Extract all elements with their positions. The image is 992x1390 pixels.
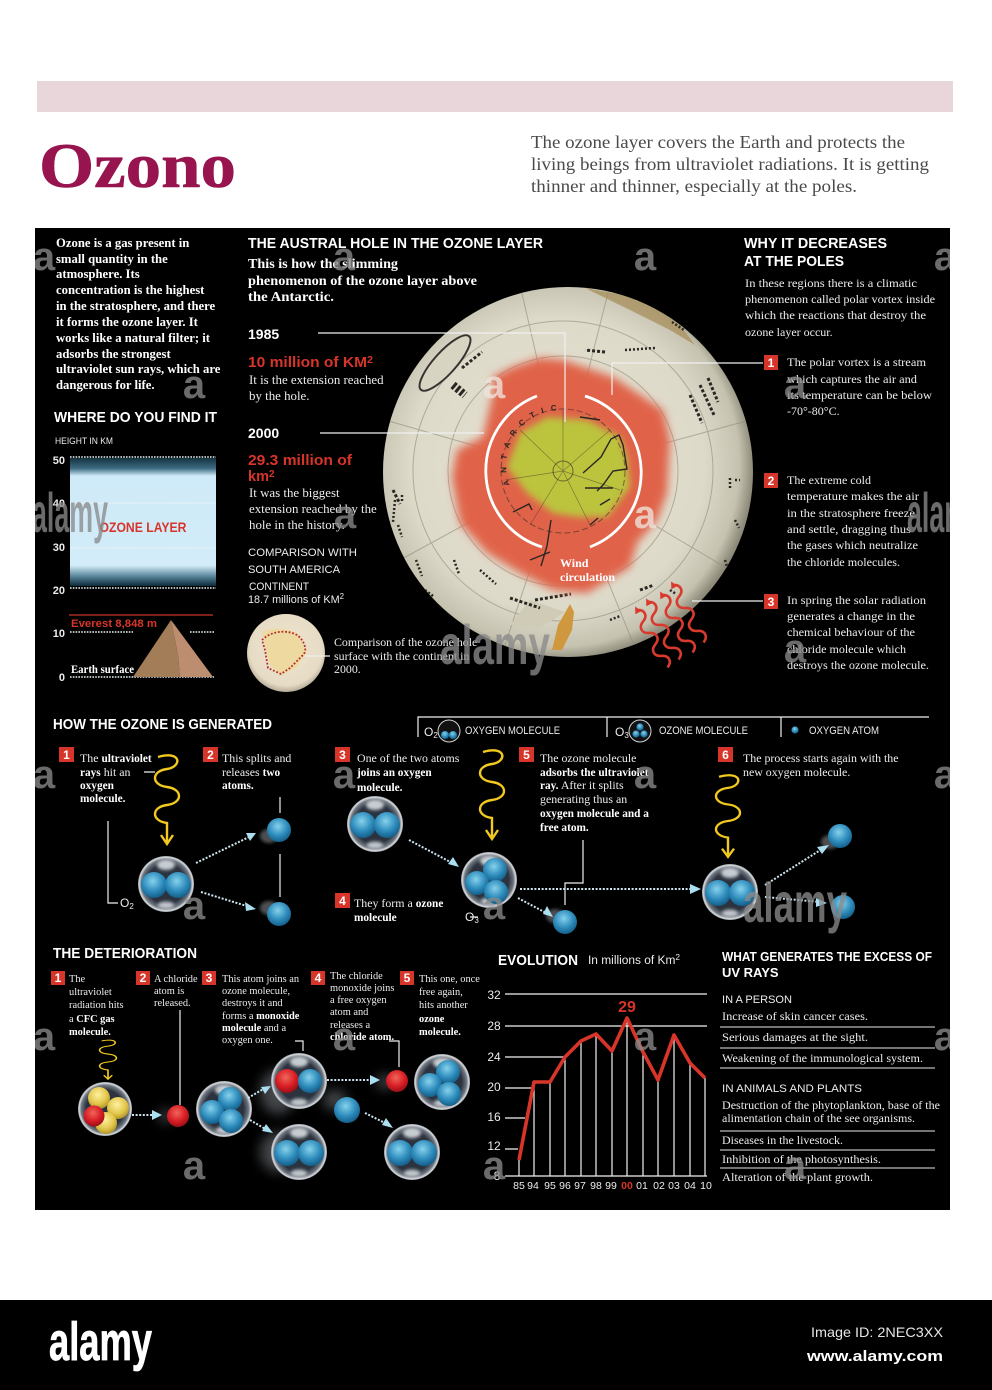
soft molecule shadows — [158, 1070, 394, 1172]
legend: OXYGEN ATOM — [809, 725, 879, 737]
watermark letters: a — [334, 493, 357, 537]
formula labels: O — [465, 910, 474, 924]
footer logo: alamy — [49, 1312, 152, 1372]
left intro text: concentration is the highest — [56, 283, 205, 297]
step 2: This splits and — [222, 751, 291, 765]
1985 data: 2 — [367, 355, 373, 366]
step 1: its temperature can be below — [787, 388, 932, 402]
watermark letters: alamy — [743, 871, 847, 934]
panel: why it decreases: phenomenon called polar vortex inside — [745, 292, 935, 306]
step 3: One of the two atoms — [357, 751, 460, 765]
in animals and plants: IN ANIMALS AND PLANTS — [722, 1083, 862, 1095]
heading: where do you find it: WHERE DO YOU FIND IT — [54, 409, 217, 426]
left intro text: adsorbs the strongest — [56, 347, 171, 361]
step 3: 3 — [768, 595, 775, 609]
step 3: molecule and a — [222, 1023, 286, 1034]
y axis labels: 28 — [487, 1019, 501, 1033]
step 4: a free oxygen — [330, 995, 387, 1006]
oxygen atoms — [267, 818, 855, 934]
step 3: ozone molecule, — [222, 986, 290, 997]
formula labels: 2 — [129, 902, 134, 911]
step 4 — [335, 893, 443, 924]
step 4: releases a — [330, 1020, 370, 1031]
ozone hole: red area — [452, 358, 670, 593]
main black panel — [35, 228, 950, 1210]
step 3 — [335, 747, 460, 794]
watermark letters: a — [483, 884, 506, 928]
globe illustration — [383, 287, 753, 668]
step 2: A chloride — [154, 974, 198, 985]
step 5: 5 — [523, 748, 530, 762]
panel: evolution chart: 2 — [675, 953, 681, 962]
heading: austral hole: THE AUSTRAL HOLE IN THE OZONE LAYER — [248, 235, 543, 252]
heading: austral hole: This is how the slimming — [248, 256, 398, 271]
x axis labels: 99 — [605, 1180, 617, 1192]
height chart — [53, 436, 216, 684]
step 1: molecule. — [69, 1027, 111, 1038]
step 1: 1 — [55, 971, 62, 985]
intro text: thinner and thinner, especially at the poles. — [531, 176, 857, 196]
intro text: living beings from ultraviolet radiations. It is getting — [531, 154, 929, 174]
in a person: IN A PERSON — [722, 994, 792, 1006]
peak value: 29 — [618, 999, 636, 1016]
top pink band — [37, 81, 953, 112]
x axis labels: 96 — [559, 1180, 571, 1192]
heading: austral hole: the Antarctic. — [248, 289, 334, 304]
watermark letters — [32, 235, 983, 1188]
panel: what generates the excess of uv rays: WHAT GENERATES THE EXCESS OF — [722, 949, 932, 964]
panel: evolution chart: In millions of Km — [588, 955, 672, 967]
y axis labels: 8 — [494, 1169, 501, 1183]
wind label — [560, 556, 615, 584]
comparison caption: surface with the continent in — [334, 649, 469, 663]
step 1: -70°-80°C. — [787, 404, 840, 418]
2000 data: 2 — [269, 469, 275, 480]
height chart: HEIGHT IN KM — [55, 436, 113, 446]
data line — [519, 1018, 705, 1160]
comparison caption: Comparison of the ozone hole — [334, 635, 477, 649]
in animals and plants: Inhibition of the photosynthesis. — [722, 1154, 881, 1166]
watermark letters: a — [934, 1015, 957, 1059]
watermark letters: a — [33, 1015, 56, 1059]
step 1: which captures the air and — [787, 372, 917, 386]
step 2 — [136, 971, 198, 1009]
dotted arrows — [132, 1075, 393, 1133]
step 4: monoxide joins — [330, 983, 394, 994]
panel: evolution chart: EVOLUTION — [498, 952, 578, 969]
height chart: 10 — [53, 628, 65, 640]
in animals and plants: Alteration of the plant growth. — [722, 1172, 873, 1184]
x axis labels: 02 — [653, 1180, 665, 1192]
step 1: a CFC gas — [69, 1014, 115, 1025]
watermark letters: a — [634, 235, 657, 279]
in a person: Serious damages at the sight. — [722, 1032, 868, 1044]
left intro text: in the stratosphere, and there — [56, 299, 216, 313]
height chart: 0 — [59, 672, 65, 684]
step 3: oxygen one. — [222, 1035, 273, 1046]
comparison with south america: CONTINENT — [249, 581, 309, 593]
step 6: 6 — [722, 748, 729, 762]
watermark letters: a — [33, 753, 56, 797]
solar radiation red waves — [630, 579, 708, 670]
wind label: Wind — [560, 556, 589, 570]
y axis labels: 12 — [487, 1139, 501, 1153]
y axis labels: 32 — [487, 988, 501, 1002]
1985 data: 10 million of KM — [248, 355, 359, 371]
step 5: The ozone molecule — [540, 751, 636, 765]
1985 data: It is the extension reached — [249, 373, 384, 387]
watermark letters: a — [483, 1144, 506, 1188]
step 4 — [311, 971, 394, 1043]
left intro text: Ozone is a gas present in — [56, 236, 189, 250]
step 3 — [202, 971, 300, 1046]
step 3: forms a monoxide — [222, 1011, 300, 1022]
intro text — [531, 132, 929, 196]
heading: austral hole: phenomenon of the ozone layer above — [248, 273, 477, 288]
leader lines to globe — [318, 333, 565, 433]
step 1: The polar vortex is a stream — [787, 355, 927, 369]
step 4: atom and — [330, 1007, 369, 1018]
legend: 2 — [433, 731, 438, 740]
x axis labels: 95 — [544, 1180, 556, 1192]
ultraviolet rays — [155, 750, 740, 857]
in animals and plants: Destruction of the phytoplankton, base of the — [722, 1100, 940, 1112]
watermark letters: a — [333, 753, 356, 797]
legend: OZONE MOLECULE — [659, 725, 748, 737]
in animals and plants: Diseases in the livestock. — [722, 1135, 843, 1147]
comparison with south america: SOUTH AMERICA — [248, 564, 341, 576]
step 6: The process starts again with the — [743, 751, 899, 765]
comparison with south america: 2 — [340, 592, 345, 601]
panel: how the ozone is generated — [53, 716, 929, 934]
step 3: In spring the solar radiation — [787, 593, 926, 607]
step 4: They form a ozone — [354, 896, 443, 910]
panel: how the ozone is generated: HOW THE OZONE IS GENERATED — [53, 716, 272, 733]
2000 data: 2000 — [248, 425, 279, 441]
step 1: oxygen — [80, 780, 115, 792]
x axis labels: 98 — [590, 1180, 602, 1192]
step 3: molecule. — [357, 782, 403, 794]
step 1: molecule. — [80, 793, 126, 805]
x axis labels: 00 — [621, 1180, 633, 1192]
step 1: ultraviolet — [69, 987, 112, 998]
step 5 — [400, 971, 480, 1038]
step 2 — [764, 473, 919, 569]
watermark letters: a — [183, 884, 206, 928]
step 5: ray. After it splits — [540, 778, 624, 792]
watermark letters: a — [483, 363, 506, 407]
connector lines — [108, 772, 583, 917]
step 5: This one, once — [419, 974, 480, 985]
ozone and oxygen molecules — [196, 1053, 470, 1180]
x axis labels: 04 — [684, 1180, 696, 1192]
watermark letters: a — [934, 235, 957, 279]
height chart: Everest 8,848 m — [71, 618, 157, 630]
atom shadows — [260, 829, 839, 923]
watermark letters: alamy — [440, 613, 550, 676]
legend: O — [424, 725, 433, 739]
height chart: OZONE LAYER — [100, 519, 186, 535]
left intro text: dangerous for life. — [56, 378, 155, 392]
ozone layer band — [70, 458, 216, 586]
CFC molecule — [78, 1082, 132, 1136]
step 2: releases two — [222, 765, 281, 779]
watermark letters: alamy — [32, 481, 108, 544]
step 4: chloride atom. — [330, 1032, 394, 1043]
x axis labels: 01 — [636, 1180, 648, 1192]
step 3: generates a change in the — [787, 609, 915, 623]
ozone hole: green centre — [507, 417, 630, 517]
watermark letters: a — [934, 753, 957, 797]
in a person: Weakening of the immunological system. — [722, 1053, 923, 1065]
step 3 — [764, 593, 929, 672]
step 1: 1 — [63, 748, 70, 762]
watermark letters: a — [784, 627, 807, 671]
legend — [418, 717, 929, 742]
x axis labels: 03 — [668, 1180, 680, 1192]
step 1 — [764, 355, 932, 418]
x axis labels — [513, 1180, 712, 1192]
formula labels: 3 — [474, 916, 479, 925]
wind circulation arcs — [486, 396, 641, 547]
step 1 — [51, 971, 124, 1038]
panel: the deterioration: THE DETERIORATION — [53, 945, 197, 962]
radiation wave — [100, 1040, 116, 1079]
wind label: circulation — [560, 570, 615, 584]
step 2: temperature makes the air — [787, 489, 919, 503]
height chart: 20 — [53, 585, 65, 597]
y axis labels: 24 — [487, 1050, 501, 1064]
x axis labels: 97 — [574, 1180, 586, 1192]
height chart: 30 — [53, 542, 65, 554]
step 4: The chloride — [330, 971, 383, 982]
height chart: 50 — [53, 455, 65, 467]
step 4: 4 — [315, 971, 322, 985]
panel: why it decreases: AT THE POLES — [744, 253, 844, 270]
legend: O — [615, 725, 624, 739]
comparison with south america — [248, 547, 357, 606]
step 2: The extreme cold — [787, 473, 871, 487]
step 5: generating thus an — [540, 792, 627, 806]
step 4: molecule — [354, 912, 397, 924]
step 2: atom is — [154, 986, 184, 997]
step 3: 3 — [339, 748, 346, 762]
watermark letters: a — [333, 235, 356, 279]
comparison with south america: 18.7 millions of KM — [248, 594, 341, 606]
1985 data — [248, 326, 384, 403]
step 2: 2 — [768, 474, 775, 488]
left intro text — [56, 236, 221, 392]
left intro text: ultraviolet sun rays, which are — [56, 362, 221, 376]
step 5: adsorbs the ultraviolet — [540, 767, 649, 779]
panel: what generates the excess of uv rays: UV RAYS — [722, 965, 779, 980]
leader lines — [612, 363, 763, 601]
step 3: destroys it and — [222, 998, 283, 1009]
step 5: free atom. — [540, 822, 589, 834]
step 3: chemical behaviour of the — [787, 625, 915, 639]
step 3: 3 — [206, 971, 213, 985]
small comparison globe — [247, 614, 330, 692]
step 5: molecule. — [419, 1027, 461, 1038]
step 1: The — [69, 974, 86, 985]
step 2: in the stratosphere freeze — [787, 506, 915, 520]
image id: Image ID: 2NEC3XX — [811, 1324, 944, 1340]
watermark letters: a — [183, 1144, 206, 1188]
in a person — [722, 994, 923, 1065]
step 2: the gases which neutralize — [787, 538, 918, 552]
height chart: 40 — [53, 498, 65, 510]
2000 data: extension reached by the — [249, 502, 377, 516]
1985 data: by the hole. — [249, 389, 310, 403]
1985 data: 1985 — [248, 326, 279, 342]
watermark letters: a — [634, 753, 657, 797]
x axis labels: 94 — [527, 1180, 539, 1192]
watermark letters: a — [183, 363, 206, 407]
left intro text: atmosphere. Its — [56, 267, 140, 281]
legend: OXYGEN MOLECULE — [465, 725, 560, 737]
left intro text: small quantity in the — [56, 252, 168, 266]
step 3: chloride molecule which — [787, 642, 906, 656]
step 2: and settle, dragging thus — [787, 522, 911, 536]
dotted arrows — [196, 833, 829, 917]
comparison with south america: COMPARISON WITH — [248, 547, 357, 559]
panel: evolution chart — [487, 952, 712, 1192]
y axis labels: 20 — [487, 1080, 501, 1094]
panel: the deterioration — [51, 945, 480, 1180]
step 2: the chloride molecules. — [787, 555, 900, 569]
website: www.alamy.com — [806, 1348, 943, 1365]
step 1: rays hit an — [80, 765, 130, 779]
step 5: hits another — [419, 1000, 468, 1011]
y axis labels — [487, 988, 501, 1183]
watermark letters: a — [634, 493, 657, 537]
panel: why it decreases: WHY IT DECREASES — [744, 235, 887, 252]
intro text: The ozone layer covers the Earth and protects the — [531, 132, 905, 152]
2000 data: km — [248, 469, 269, 485]
watermark letters: a — [784, 1144, 807, 1188]
panel: why it decreases: In these regions there is a climatic — [745, 276, 917, 290]
step 6 — [718, 747, 899, 779]
footer band — [0, 1300, 992, 1390]
2000 data — [248, 425, 377, 532]
2000 data: 29.3 million of — [248, 453, 352, 469]
step 2: released. — [154, 998, 191, 1009]
watermark letters: a — [634, 1015, 657, 1059]
watermark letters: a — [333, 1015, 356, 1059]
step 2 — [203, 747, 291, 792]
heading: austral hole — [248, 235, 543, 304]
step 4: 4 — [339, 894, 346, 908]
connector lines — [180, 1010, 399, 1105]
step 2: 2 — [140, 971, 147, 985]
panel: why it decreases — [612, 235, 935, 672]
panel: what generates the excess of uv rays — [720, 949, 940, 1184]
chlorine atoms — [167, 1070, 408, 1127]
step 3: destroys the ozone molecule. — [787, 658, 929, 672]
watermark letters: a — [33, 235, 56, 279]
step 5: oxygen molecule and a — [540, 808, 649, 820]
step 5: ozone — [419, 1014, 445, 1025]
step 2: atoms. — [222, 780, 254, 792]
formula labels: O — [120, 896, 129, 910]
mountain — [133, 620, 213, 677]
panel: why it decreases: which the reactions that destroy the — [745, 308, 926, 322]
in animals and plants: alimentation chain of the see organisms. — [722, 1113, 915, 1125]
step 1 — [59, 747, 152, 805]
left intro text: it forms the ozone layer. It — [56, 315, 199, 329]
comparison caption — [334, 635, 477, 676]
step 2: 2 — [207, 748, 214, 762]
left intro text: works like a natural filter; it — [56, 331, 211, 345]
step 5: free again, — [419, 987, 463, 998]
antarctic label on globe: ANTARCTIC — [500, 405, 556, 485]
y axis labels: 16 — [487, 1110, 501, 1124]
gridlines and bars — [505, 994, 707, 1176]
molecules — [138, 796, 758, 920]
2000 data: It was the biggest — [249, 486, 340, 500]
panel: why it decreases: ozone layer occur. — [745, 325, 833, 339]
step 1: The ultraviolet — [80, 751, 152, 765]
watermark letters: a — [784, 363, 807, 407]
formula labels — [120, 896, 479, 925]
step 5 — [519, 747, 649, 834]
step 3: joins an oxygen — [356, 767, 432, 779]
2000 data: hole in the history. — [249, 518, 345, 532]
legend: 3 — [624, 731, 629, 740]
step 1: 1 — [768, 356, 775, 370]
in a person: Increase of skin cancer cases. — [722, 1011, 868, 1023]
land masses — [585, 288, 695, 345]
step 5: 5 — [404, 971, 411, 985]
step 1: radiation hits — [69, 1000, 124, 1011]
height chart: Earth surface — [71, 664, 134, 676]
step 3: This atom joins an — [222, 974, 300, 985]
step 6: new oxygen molecule. — [743, 765, 850, 779]
x axis labels: 85 — [513, 1180, 525, 1192]
comparison caption: 2000. — [334, 662, 361, 676]
title: Ozono — [39, 130, 236, 201]
in animals and plants — [722, 1083, 940, 1184]
x axis labels: 10 — [700, 1180, 712, 1192]
